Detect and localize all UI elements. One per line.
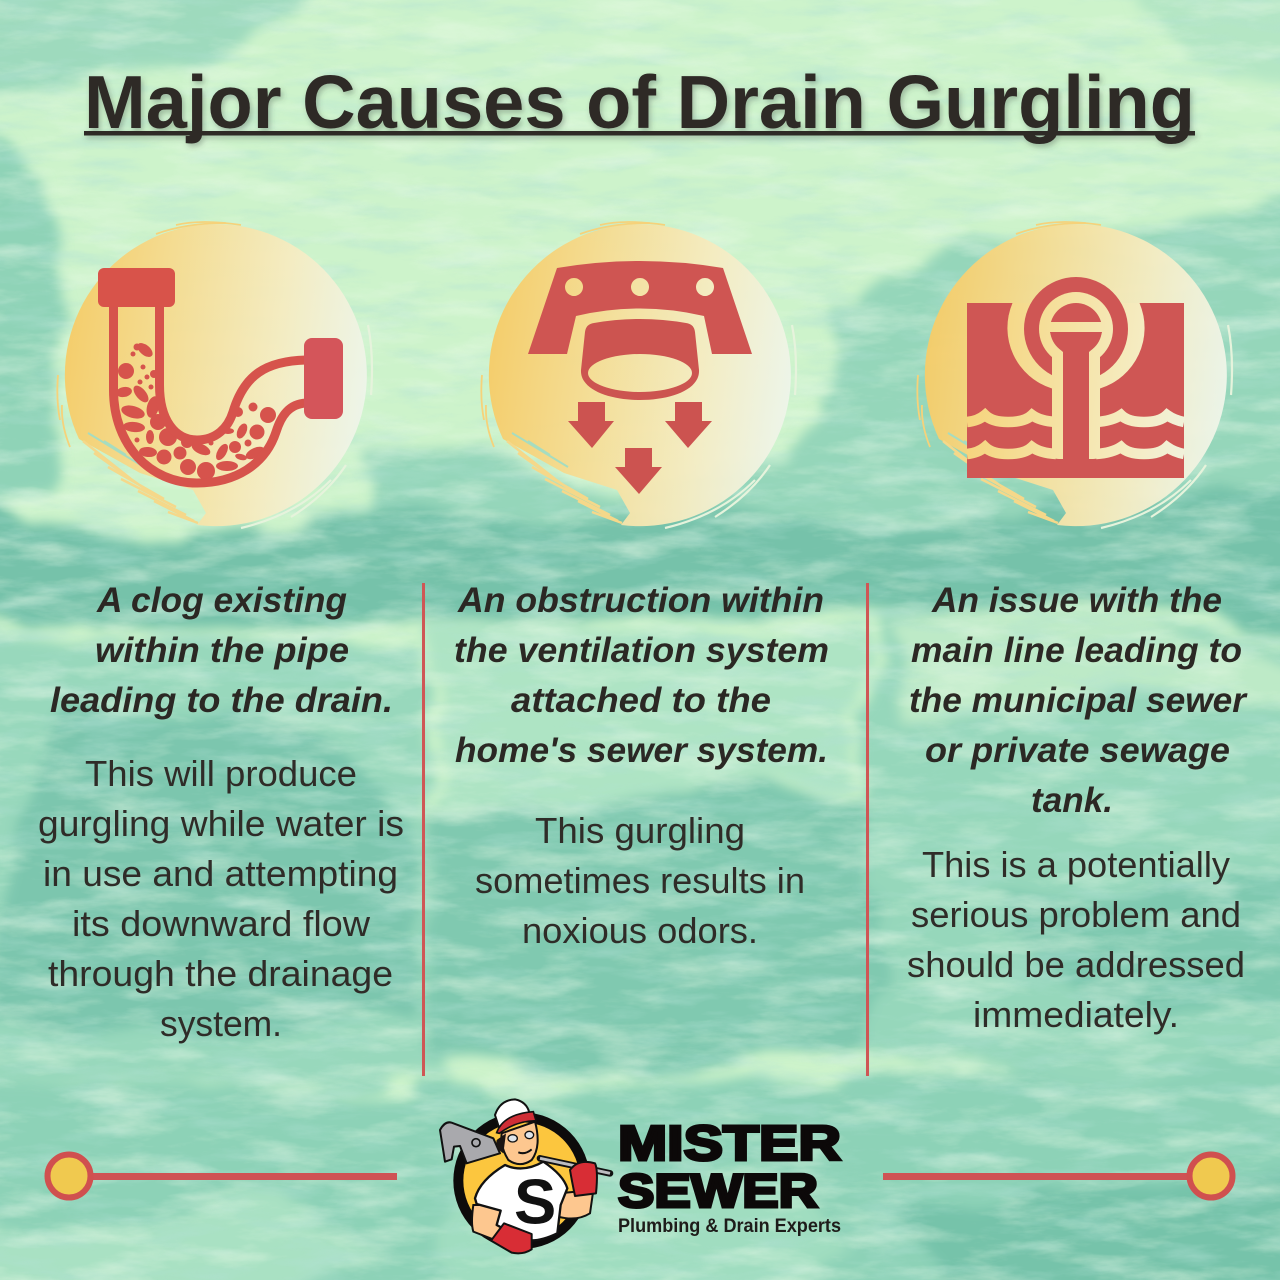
heading 3: or private sewage [925,731,1230,770]
clog debris [115,340,276,480]
water waves [967,415,1184,454]
title: Major Causes of Drain Gurgling [84,60,1195,144]
heading 2 [454,581,829,770]
arrow: down right [665,402,712,448]
heading 2: An obstruction within [457,581,824,620]
footer rule right [883,1154,1232,1198]
body 3 [907,844,1245,1035]
body 1 [38,753,404,1044]
column 2: ventilation [454,581,829,951]
heading 2: home's sewer system. [455,731,828,770]
mascot [440,1099,610,1253]
body 2 [475,810,805,951]
body 2: noxious odors. [522,910,758,951]
body 1: gurgling while water is [38,803,404,844]
body 1: This will produce [85,753,357,794]
logo wordmark: Plumbing & Drain Experts [618,1216,841,1237]
arrow: down left [568,402,614,448]
footer rule left [48,1154,397,1198]
body 2: This gurgling [535,810,745,851]
body 1: in use and attempting [43,853,398,894]
pipe ring [1007,277,1145,388]
logo: Mister Sewer [440,1099,841,1253]
column 3: main line [907,581,1248,1035]
body 3: This is a potentially [922,844,1230,885]
heading 1: within the pipe [95,631,349,670]
body 1: its downward flow [72,903,371,944]
divider left [422,583,425,1076]
heading 2: the ventilation system [454,631,829,670]
heading 3: main line leading to [911,631,1242,670]
heading 3: tank. [1031,781,1113,820]
pipe top cap [98,268,175,307]
icon backdrop: brush circle 1 [57,222,372,528]
outflow pipe [1050,332,1102,478]
icon: main sewer outfall [917,222,1232,528]
column 1: clog [38,581,404,1044]
body 1: system. [160,1003,282,1044]
logo wordmark: SEWER [618,1164,818,1217]
heading 3 [909,581,1248,820]
arrow: down centre [615,448,662,494]
pipe walls [114,300,306,483]
heading 3: An issue with the [931,581,1222,620]
body 2: sometimes results in [475,860,805,901]
heading 1 [50,581,393,720]
divider right [866,583,869,1076]
heading 1: leading to the drain. [50,681,393,720]
icon: clogged P-trap pipe [57,222,372,528]
mascot: S [514,1167,556,1237]
icon: blocked vent [481,222,796,528]
heading 3: the municipal sewer [909,681,1248,720]
body 3: should be addressed [907,944,1245,985]
body 3: serious problem and [911,894,1241,935]
body 1: through the drainage [48,953,393,994]
icon backdrop: brush circle 2 [481,222,796,528]
vent pipe opening [581,319,699,400]
logo wordmark: MISTER [618,1117,841,1171]
heading 2: attached to the [511,681,771,720]
ground block [967,303,1184,478]
body 3: immediately. [973,994,1179,1035]
heading 1: A clog existing [96,581,347,620]
vent hood [528,261,752,354]
icon backdrop: brush circle 3 [917,222,1232,528]
logo wordmark [618,1117,841,1237]
pipe end cap [304,338,343,419]
